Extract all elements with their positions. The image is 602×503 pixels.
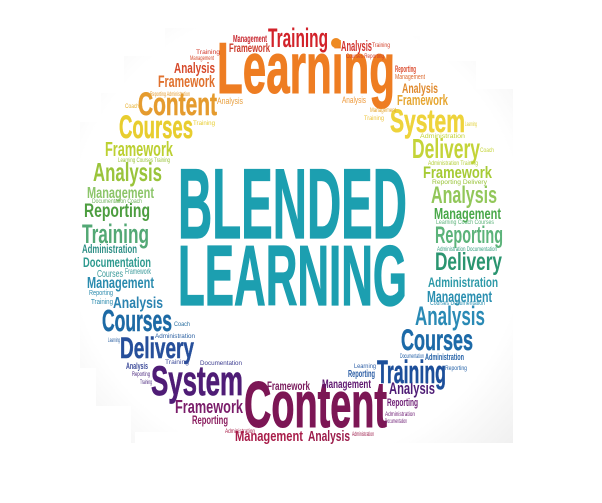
word group: top red and orange: Analysis	[342, 95, 366, 105]
word group: top red and orange: Framework	[229, 41, 270, 55]
small filler words: Learning	[354, 364, 376, 370]
word group: left teal and blue: Management	[87, 275, 154, 292]
word group: left teal and blue: Delivery	[120, 332, 194, 365]
title: Blended Learning	[178, 148, 407, 324]
word group: top red and orange: Analysis	[217, 96, 243, 106]
word group: left teal and blue: Courses	[102, 303, 172, 338]
small filler words: Documentation	[385, 419, 407, 425]
word group: right blue: Training	[377, 354, 446, 390]
word group: right green and yellow: Management	[434, 206, 501, 223]
small filler words: Training	[372, 43, 390, 49]
small filler words: Coach	[480, 148, 494, 154]
word group: right green and yellow: System	[390, 103, 465, 139]
small filler words: Courses Documentation	[430, 301, 485, 307]
small filler words	[92, 43, 497, 438]
word group: top red and orange: Analysis	[341, 38, 372, 55]
word cloud ring	[82, 23, 503, 445]
small filler words: Management	[370, 108, 396, 114]
word group: right green and yellow: Delivery	[412, 133, 480, 164]
small filler words: Management	[190, 56, 214, 62]
word group: left teal and blue	[82, 242, 194, 371]
small filler words: Learning Coach Courses	[436, 220, 494, 226]
small filler words: Administration	[385, 412, 415, 418]
word group: right green and yellow: Delivery	[435, 248, 502, 276]
small filler words: Administration	[225, 429, 255, 435]
word group: right blue: Administration	[425, 352, 464, 362]
word group: bottom purple: Analysis	[308, 428, 350, 445]
word group: left teal and blue: Analysis	[126, 361, 148, 371]
small filler words: Administration	[155, 334, 195, 340]
small filler words: Coach	[174, 322, 190, 328]
word group: bottom purple: Framework	[175, 397, 244, 417]
word group: bottom purple: Content	[244, 368, 387, 441]
small filler words: Documentation	[400, 354, 424, 360]
word group: bottom purple: Analysis	[389, 379, 435, 398]
small filler words: Documentation Coach	[92, 199, 142, 205]
word group: left teal and blue: Administration	[82, 242, 137, 256]
word group: left teal and blue: Courses	[97, 269, 123, 280]
word group: bottom purple: Reporting	[387, 397, 418, 409]
word group: top red and orange: Framework	[158, 72, 215, 91]
word group: left yellow and green: Content	[138, 86, 217, 122]
word group: left yellow and green: Framework	[105, 139, 174, 161]
word group: bottom purple	[151, 357, 435, 445]
word group: bottom purple: Framework	[267, 379, 310, 393]
small filler words: Administration	[352, 432, 374, 438]
word group: top red and orange: Management	[233, 34, 267, 45]
small filler words: Training	[140, 380, 152, 386]
word group: bottom purple: System	[151, 357, 243, 404]
small filler words: Administration	[420, 134, 465, 140]
small filler words: Learning	[108, 338, 120, 344]
word group: left yellow and green	[82, 86, 217, 249]
small filler words: Reporting Delivery	[432, 180, 487, 186]
word group: left teal and blue: Reporting	[89, 290, 113, 297]
small filler words: Administration Training	[428, 161, 478, 167]
small filler words: Reporting	[445, 366, 467, 372]
small filler words: Reporting Administration	[150, 92, 190, 98]
word group: left teal and blue: Analysis	[113, 295, 163, 312]
word group: right blue: Reporting	[348, 369, 375, 380]
small filler words: Courses Reporting	[346, 54, 384, 60]
word group: top red and orange: Analysis	[174, 60, 215, 77]
word group: top red and orange: Learning	[217, 29, 395, 109]
word group: left teal and blue: Documentation	[83, 254, 151, 270]
word group: left teal and blue: Training	[91, 299, 113, 306]
word group: right green and yellow: Framework	[423, 163, 492, 182]
word group: right green and yellow: Analysis	[431, 182, 497, 209]
word group: right blue: Management	[427, 289, 492, 306]
word group: bottom purple: Management	[235, 428, 303, 445]
word group: right green and yellow	[390, 64, 503, 276]
word group: left yellow and green: Training	[82, 219, 149, 249]
word group: top red and orange: Training	[268, 23, 328, 53]
small filler words: Reporting	[132, 372, 150, 378]
word group: right blue	[348, 274, 498, 390]
word group: right green and yellow: Reporting	[395, 64, 416, 74]
word group: bottom purple: Reporting	[192, 413, 228, 427]
word group: right blue: Administration	[428, 274, 498, 290]
word group: right blue: Courses	[401, 324, 473, 357]
small filler words: Learning Courses Training	[118, 158, 170, 164]
small filler words: Training	[165, 360, 189, 366]
word group: right green and yellow: Reporting	[435, 222, 503, 249]
small filler words: Training	[364, 116, 384, 122]
word group: bottom purple: Management	[322, 377, 371, 391]
small filler words: Documentation	[200, 361, 242, 367]
small filler words: Training	[193, 121, 215, 127]
word group: right green and yellow: Framework	[397, 92, 448, 109]
word group: left yellow and green: Analysis	[93, 157, 162, 187]
word group: left teal and blue: Framework	[125, 267, 152, 276]
small filler words: Coach	[125, 104, 139, 110]
word group: right blue: Analysis	[415, 301, 485, 331]
word group: left yellow and green: Courses	[119, 109, 193, 145]
word group: right green and yellow: Analysis	[402, 80, 438, 96]
word group: top red and orange	[158, 23, 395, 109]
word group: left yellow and green: Management	[87, 185, 154, 202]
small filler words: Administration Documentation	[437, 247, 497, 253]
small filler words: Training	[196, 50, 220, 56]
word group: right green and yellow: Management	[395, 74, 425, 81]
stepped pale grey background	[80, 28, 513, 443]
word group: left yellow and green: Reporting	[84, 201, 150, 222]
small filler words: Learning	[465, 122, 477, 128]
